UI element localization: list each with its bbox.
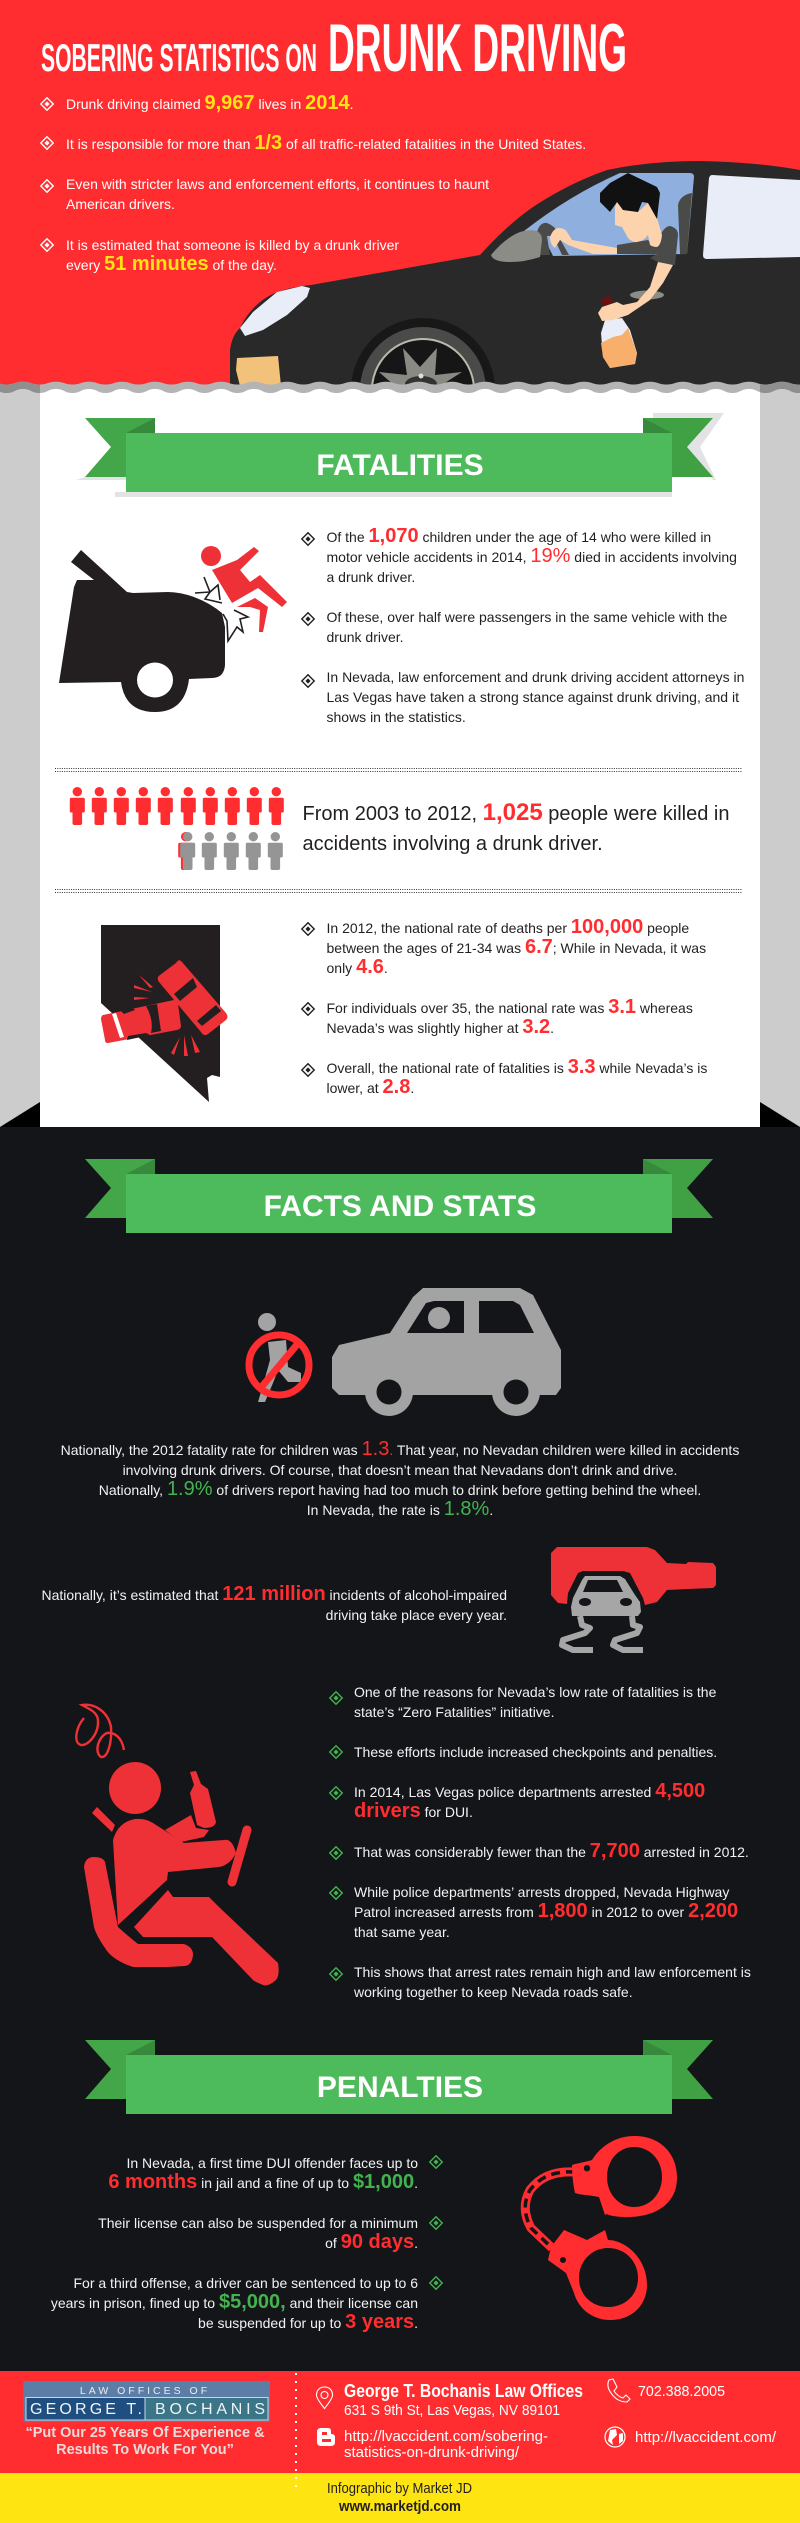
fatalities bullet list: motor vehicle accidents in 2014, 19% died in accidents involving (326, 545, 737, 567)
illustration: car with drunk driver (230, 161, 800, 384)
fatalities bullet list: Las Vegas have taken a strong stance against drunk driving, and it (326, 689, 739, 705)
intro bullet list: It is responsible for more than 1/3 of all traffic-related fatalities in the United States. (66, 132, 586, 154)
banner: penalties: PENALTIES (317, 2071, 483, 2104)
panel: grey side walls (0, 386, 800, 1127)
panel: header (0, 0, 800, 384)
banner: fatalities (76, 413, 724, 497)
national rates bullet list: For individuals over 35, the national rate was 3.1 whereas (326, 996, 693, 1018)
fatalities bullet list: Of the 1,070 children under the age of 14 who were killed in (326, 525, 711, 547)
credit url: www.marketjd.com (338, 2498, 461, 2515)
icon: car hitting pedestrian (59, 546, 287, 712)
icon: intoxicated driver (76, 1705, 279, 1985)
fatalities bullet list: drunk driver. (326, 629, 404, 645)
zero fatalities bullet list: Patrol increased arrests from 1,800 in 2012 to over 2,200 (354, 1900, 738, 1922)
national rates bullet list: only 4.6. (326, 956, 388, 978)
intro bullet list (41, 92, 586, 275)
logo: BOCHANIS (155, 2401, 265, 2418)
banner: facts and stats: FACTS AND STATS (264, 1190, 536, 1223)
panel: white fatalities background (40, 386, 760, 1127)
banner: penalties (85, 2040, 713, 2114)
zero fatalities bullet list: working together to keep Nevada roads safe. (353, 1984, 633, 2000)
credit: Infographic by Market JD (327, 2480, 472, 2497)
intro bullet list: Drunk driving claimed 9,967 lives in 2014. (66, 92, 354, 114)
zero fatalities bullet list (330, 1684, 751, 2000)
national rates bullet list: In 2012, the national rate of deaths per 100,000 people (326, 916, 689, 938)
panel: dark background (0, 1127, 800, 2371)
logo: LAW OFFICES OF (80, 2385, 210, 2397)
address: 631 S 9th St, Las Vegas, NV 89101 (344, 2402, 560, 2419)
national rates bullet list: Overall, the national rate of fatalities is 3.3 while Nevada’s is (326, 1056, 707, 1078)
tagline: Results To Work For You” (56, 2442, 234, 2458)
tagline (25, 2425, 265, 2458)
dotted vertical divider (295, 2373, 297, 2488)
zero fatalities bullet list: These efforts include increased checkpoints and penalties. (354, 1744, 717, 1760)
icon: bottle and skidding car (551, 1547, 716, 1650)
text: 121 million: Nationally, it’s estimated that 121 million incidents of alcohol-impaired (42, 1583, 507, 1605)
zero fatalities bullet list: That was considerably fewer than the 7,700 arrested in 2012. (354, 1840, 749, 1862)
national rates bullet list (302, 916, 707, 1098)
icon: location pin (316, 2387, 332, 2408)
intro bullet list: American drivers. (66, 196, 175, 212)
national rates bullet list: lower, at 2.8. (326, 1076, 414, 1098)
penalties list (51, 2155, 442, 2333)
logo (24, 2381, 270, 2422)
icon: handcuffs (525, 2136, 677, 2320)
title: SOBERING STATISTICS ON (41, 37, 317, 80)
text: national fatality rate (61, 1438, 739, 1520)
penalties list: 6 months in jail and a fine of up to $1,000. (108, 2171, 418, 2193)
zero fatalities bullet list: state’s “Zero Fatalities” initiative. (354, 1704, 554, 1720)
phone number: 702.388.2005 (638, 2383, 725, 2400)
dark corner triangles (0, 1102, 800, 1127)
fatalities bullet list: Of these, over half were passengers in the same vehicle with the (326, 609, 727, 625)
blog link: http://lvaccident.com/sobering- (344, 2428, 548, 2445)
icon: car and child crossed out (249, 1288, 561, 1416)
zero fatalities bullet list: In 2014, Las Vegas police departments arrested 4,500 (354, 1780, 705, 1802)
text: national fatality rate: Nationally, 1.9% of drivers report having had too much to drink before getting behind the wheel. (99, 1478, 701, 1500)
penalties list: be suspended for up to 3 years. (198, 2311, 418, 2333)
website link: http://lvaccident.com/ (635, 2429, 777, 2446)
icon: blogger (317, 2428, 335, 2446)
dotted divider (55, 768, 742, 892)
text: national fatality rate: involving drunk drivers. Of course, that doesn’t mean that Nevadans don’t drink and drive. (123, 1462, 677, 1478)
zero fatalities bullet list: While police departments’ arrests dropped, Nevada Highway (354, 1884, 729, 1900)
fatalities bullet list (302, 525, 744, 725)
text: 121 million: driving take place every year. (326, 1607, 507, 1623)
penalties list: of 90 days. (325, 2231, 418, 2253)
intro bullet list: Even with stricter laws and enforcement efforts, it continues to haunt (66, 176, 489, 192)
zero fatalities bullet list: drivers for DUI. (354, 1800, 473, 1822)
icon: phone (608, 2379, 630, 2402)
penalties list: In Nevada, a first time DUI offender faces up to (126, 2155, 418, 2171)
icon: Nevada map with crashed cars (101, 925, 228, 1102)
fatalities bullet list: shows in the statistics. (326, 709, 466, 725)
intro bullet list: every 51 minutes of the day. (66, 253, 277, 275)
text: 121 million (42, 1583, 507, 1623)
tagline: “Put Our 25 Years Of Experience & (25, 2425, 265, 2441)
national rates bullet list: between the ages of 21-34 was 6.7; While in Nevada, it was (326, 936, 706, 958)
zero fatalities bullet list: One of the reasons for Nevada’s low rate of fatalities is the (354, 1684, 717, 1700)
fatalities bullet list: a drunk driver. (326, 569, 415, 585)
logo: GEORGE T. (30, 2401, 142, 2418)
intro bullet list: It is estimated that someone is killed by a drunk driver (66, 237, 399, 253)
stat: people killed: accidents involving a drunk driver. (302, 833, 603, 855)
blog link (344, 2428, 548, 2461)
fatalities bullet list: In Nevada, law enforcement and drunk driving accident attorneys in (326, 669, 744, 685)
pictogram: people (70, 787, 284, 870)
title (41, 10, 627, 86)
banner: fatalities: FATALITIES (316, 449, 484, 482)
penalties list: Their license can also be suspended for a minimum (98, 2215, 418, 2231)
panel: footer red (0, 2371, 800, 2473)
banner: facts and stats (85, 1159, 713, 1233)
text: national fatality rate: In Nevada, the rate is 1.8%. (307, 1498, 493, 1520)
icon: globe (605, 2427, 625, 2447)
text: national fatality rate: Nationally, the 2012 fatality rate for children was 1.3. That year, no Nevadan children were killed in accidents (61, 1438, 739, 1460)
penalties list: For a third offense, a driver can be sentenced to up to 6 (73, 2275, 418, 2291)
stat: people killed: From 2003 to 2012, 1,025 people were killed in (302, 799, 729, 826)
penalties list: years in prison, fined up to $5,000, and their license can (51, 2291, 418, 2313)
stat: people killed (302, 799, 729, 855)
blog link: statistics-on-drunk-driving/ (344, 2444, 520, 2461)
decorative wavy strip (0, 378, 800, 398)
zero fatalities bullet list: This shows that arrest rates remain high and law enforcement is (354, 1964, 751, 1980)
panel: footer yellow (0, 2473, 800, 2523)
office name: George T. Bochanis Law Offices (344, 2381, 583, 2401)
zero fatalities bullet list: that same year. (354, 1924, 450, 1940)
national rates bullet list: Nevada’s was slightly higher at 3.2. (326, 1016, 554, 1038)
